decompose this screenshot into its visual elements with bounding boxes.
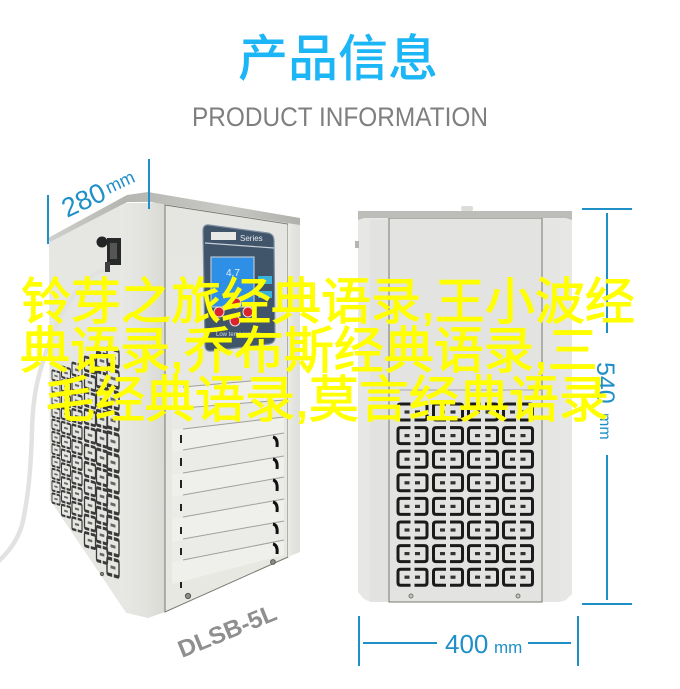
dimension: 400 mm width bbox=[358, 616, 579, 666]
yellow overlay headline bbox=[20, 274, 635, 428]
dimension: 540 mm height bbox=[582, 208, 632, 605]
side knob bbox=[355, 241, 359, 248]
corner strip bbox=[120, 203, 165, 618]
dimension: 400 mm width: 400 bbox=[445, 629, 488, 659]
title: 产品信息 bbox=[238, 31, 438, 87]
top knob bbox=[461, 206, 473, 211]
right edge strip bbox=[288, 222, 300, 557]
dimension: 280 mm depth: mm bbox=[102, 167, 138, 198]
power cable bbox=[0, 270, 107, 562]
power switch and plug bbox=[96, 236, 121, 272]
top rim bbox=[48, 192, 300, 242]
right product: chiller front view bbox=[355, 206, 572, 602]
front perforated grille bbox=[398, 404, 532, 585]
control panel: Series bbox=[240, 234, 263, 243]
top rim bbox=[358, 211, 572, 220]
side perforated grille bbox=[52, 348, 119, 577]
side face bbox=[49, 200, 127, 614]
dimension: 540 mm height: mm bbox=[596, 413, 613, 440]
control panel bbox=[203, 225, 275, 351]
dimension: 540 mm height: 540 bbox=[591, 362, 619, 404]
screws bbox=[409, 594, 520, 598]
subtitle: PRODUCT INFORMATION bbox=[192, 102, 488, 132]
control panel: Low temperature bbox=[216, 332, 262, 338]
yellow overlay headline: 铃芽之旅经典语录,王小波经 bbox=[21, 274, 635, 330]
left product: chiller in three-quarter view bbox=[0, 192, 300, 618]
body bbox=[358, 215, 572, 602]
panel seam bbox=[389, 389, 542, 391]
control panel: 4.7 bbox=[226, 268, 240, 279]
yellow overlay headline: 毛经典语录,莫言经典语录 bbox=[45, 372, 609, 428]
side strips bbox=[370, 220, 389, 602]
dimension: 280 mm depth bbox=[47, 159, 150, 244]
centre panel bbox=[389, 218, 542, 602]
front face bbox=[165, 205, 288, 612]
model label: DLSB-5L bbox=[174, 600, 281, 664]
yellow overlay headline: 典语录,乔布斯经典语录,三 bbox=[20, 323, 598, 379]
louvers bbox=[172, 378, 284, 588]
dimension: 400 mm width: mm bbox=[494, 638, 522, 657]
screws bbox=[100, 560, 275, 599]
dimension: 280 mm depth: 280 bbox=[57, 177, 110, 223]
